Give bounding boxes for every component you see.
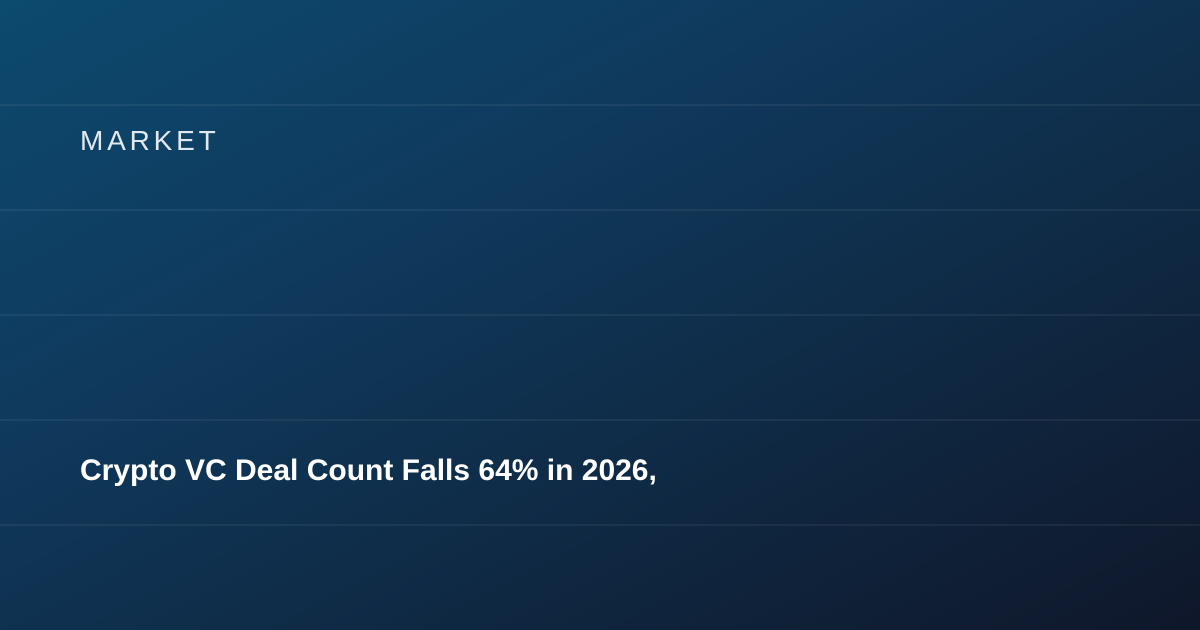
headline: Crypto VC Deal Count Falls 64% in 2026, (80, 454, 657, 487)
category label: MARKET (80, 125, 219, 156)
